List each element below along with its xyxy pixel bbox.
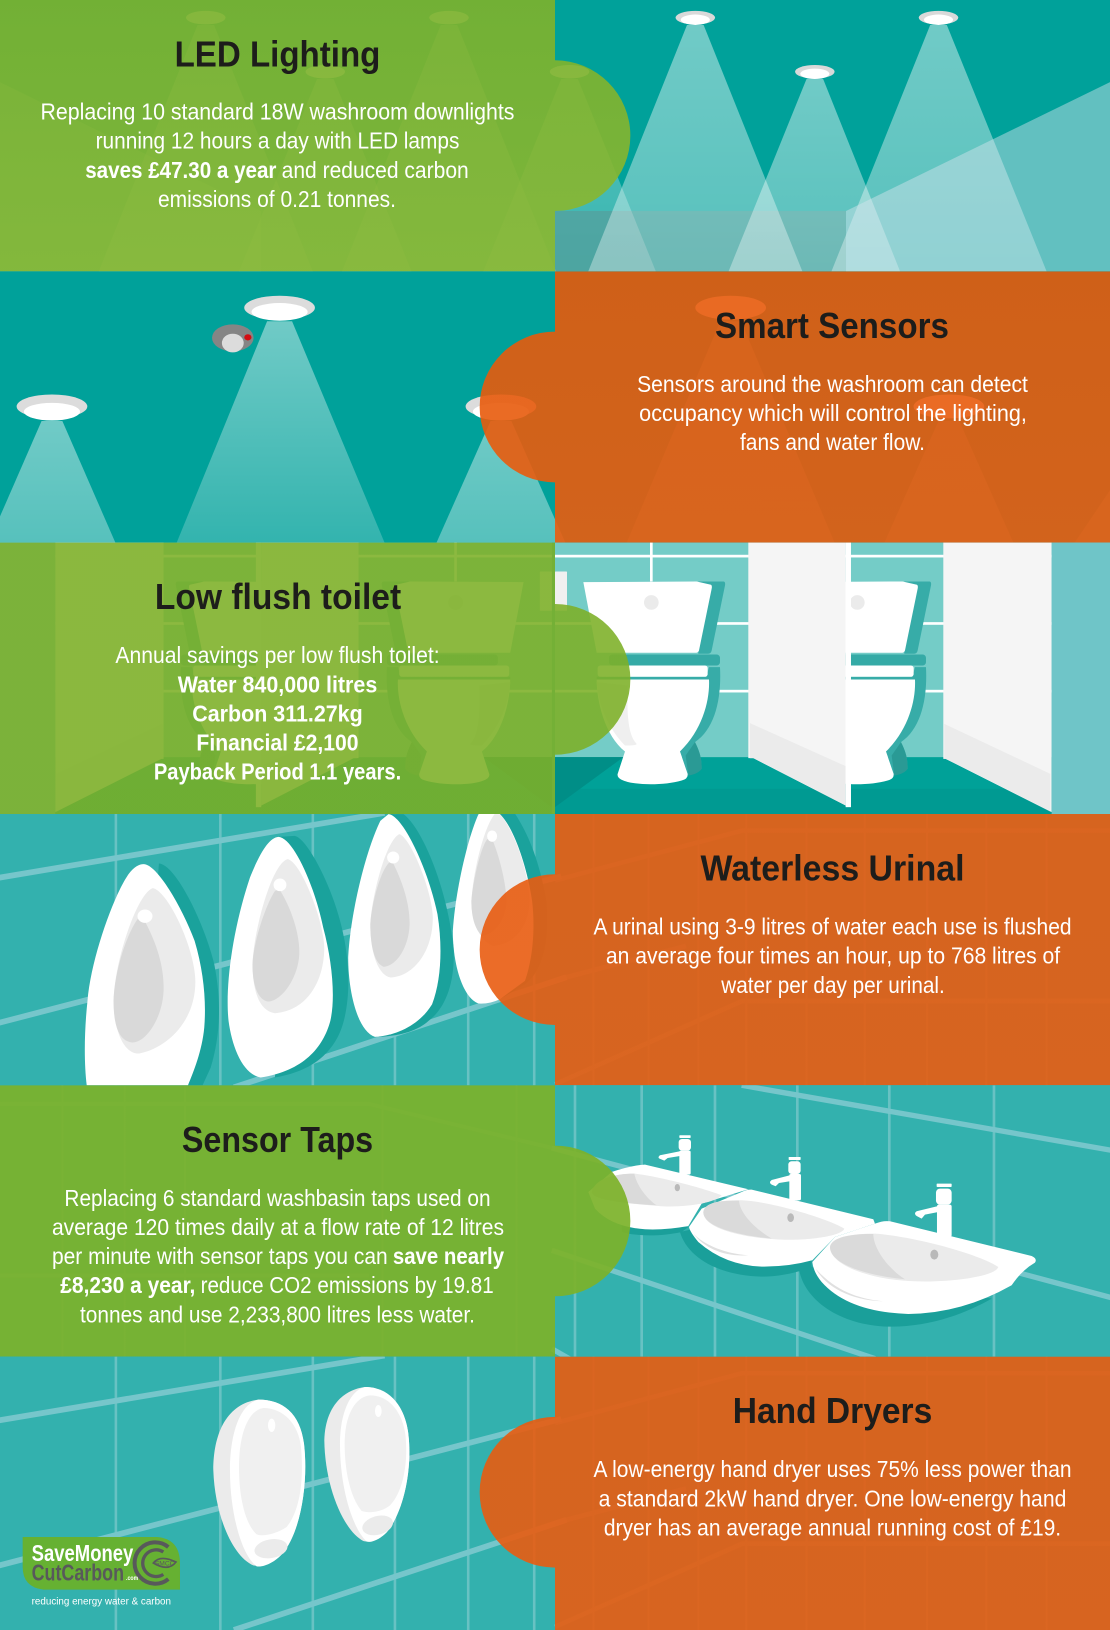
- logo: SaveMoney CutCarbon: [23, 1537, 180, 1607]
- icon: motion sensor: [212, 324, 254, 352]
- logo: SaveMoney CutCarbon: reducing energy water & carbon: [32, 1596, 171, 1607]
- text: waterless urinal body: A urinal using 3-9 litres of water each use is flushed: [593, 914, 1072, 940]
- panel: smart sensors: [0, 271, 1110, 543]
- icon: downlight 1: [676, 11, 715, 25]
- orange panel with bubble: [480, 1357, 1110, 1630]
- heading: Sensor Taps: Sensor Taps: [182, 1119, 373, 1160]
- illustration: basin 2: [680, 1190, 875, 1277]
- heading: Waterless Urinal: Waterless Urinal: [701, 847, 964, 888]
- icon: ceiling light left: [17, 395, 87, 420]
- illustration: hand dryer 2: [324, 1387, 409, 1542]
- text: hand dryers body: [593, 1456, 1072, 1540]
- panel: waterless urinal: [0, 811, 1110, 1091]
- logo: SaveMoney CutCarbon: SMCC: [155, 1561, 175, 1568]
- tile lines: [555, 1085, 1110, 1356]
- text: hand dryers body: dryer has an average annual running cost of £19.: [604, 1514, 1061, 1540]
- text: sensor taps body: per minute with sensor taps you can: [52, 1243, 388, 1269]
- text: LED lighting body: saves £47.30 a year: [85, 157, 277, 183]
- icon: downlight 2: [795, 65, 835, 79]
- illustration: basin 3: [799, 1221, 1036, 1327]
- heading: Smart Sensors: Smart Sensors: [715, 305, 949, 346]
- text: sensor taps body: Replacing 6 standard washbasin taps used on: [64, 1185, 491, 1211]
- text: sensor taps body: £8,230 a year,: [60, 1272, 195, 1298]
- text: LED lighting body: and reduced carbon: [282, 157, 469, 183]
- text: smart sensors body: occupancy which will control the lighting,: [639, 400, 1027, 426]
- text: smart sensors body: fans and water flow.: [740, 429, 925, 455]
- text: LED lighting body: emissions of 0.21 tonnes.: [158, 186, 396, 212]
- left light cones: [0, 11, 656, 271]
- text: LED lighting body: Replacing 10 standard 18W washroom downlights: [41, 99, 514, 125]
- illustration: hand dryer 1: [213, 1400, 305, 1567]
- text: hand dryers body: a standard 2kW hand dryer. One low-energy hand: [599, 1485, 1066, 1511]
- text: low flush body: Financial £2,100: [196, 730, 359, 756]
- text: smart sensors body: Sensors around the washroom can detect: [637, 371, 1028, 397]
- text: sensor taps body: reduce CO2 emissions by 19.81: [201, 1272, 494, 1298]
- text: LED lighting body: [41, 99, 514, 212]
- panel: LED lighting: [0, 0, 1110, 271]
- text: sensor taps body: [52, 1185, 504, 1327]
- tile lines under orange: [554, 1082, 558, 1086]
- text: LED lighting body: running 12 hours a day with LED lamps: [96, 128, 459, 154]
- tile lines under orange: [555, 1357, 1110, 1630]
- illustration: urinal 2: [228, 836, 348, 1078]
- right light cones: [555, 25, 1110, 271]
- heading: Low flush toilet: Low flush toilet: [155, 576, 401, 617]
- text: low flush body: Water 840,000 litres: [178, 671, 377, 697]
- green panel with bubble: [0, 543, 630, 814]
- text: waterless urinal body: water per day per urinal.: [720, 972, 945, 998]
- text: sensor taps body: average 120 times daily at a flow rate of 12 litres: [52, 1214, 504, 1240]
- text: waterless urinal body: [593, 914, 1072, 998]
- text: low flush body: [115, 642, 440, 785]
- heading: LED Lighting: LED Lighting: [175, 34, 380, 75]
- text: low flush body: Payback Period 1.1 years.: [154, 759, 401, 785]
- illustration: urinal 4: [453, 811, 547, 1004]
- heading: Hand Dryers: Hand Dryers: [733, 1390, 932, 1431]
- illustration: toilet cubicles: [555, 542, 1110, 815]
- panel: low flush toilet: [0, 542, 1110, 815]
- icon: tap 3: [915, 1184, 952, 1237]
- logo: SaveMoney CutCarbon: CutCarbon: [32, 1559, 124, 1585]
- orange panel with bubble: [480, 271, 1110, 543]
- illustration: basins and taps: [588, 1135, 1036, 1327]
- orange panel with bubble: [480, 814, 1110, 1085]
- green panel with bubble: [0, 0, 630, 271]
- icon: ceiling light right: [466, 395, 536, 420]
- text: hand dryers body: A low-energy hand dryer uses 75% less power than: [593, 1456, 1072, 1482]
- logo: SaveMoney CutCarbon: .com: [126, 1576, 138, 1582]
- panel: sensor taps: [0, 1085, 1110, 1362]
- text: low flush body: Annual savings per low flush toilet:: [115, 642, 440, 668]
- text: waterless urinal body: an average four times an hour, up to 768 litres of: [606, 943, 1061, 969]
- light cones: [0, 321, 565, 542]
- text: sensor taps body: tonnes and use 2,233,800 litres less water.: [80, 1301, 475, 1327]
- green panel with bubble: [0, 1085, 630, 1357]
- text: low flush body: Carbon 311.27kg: [192, 700, 363, 726]
- icon: downlight 3: [919, 11, 958, 25]
- icon: tap 1: [659, 1135, 691, 1175]
- icon: ceiling light centre: [244, 296, 315, 321]
- illustration: basin 1: [588, 1165, 748, 1235]
- icon: faint lights right: [695, 296, 984, 418]
- panel: hand dryers: [0, 1356, 1110, 1630]
- logo: SaveMoney CutCarbon: SaveMoney: [32, 1540, 134, 1566]
- mirrored toilet scene under green: [0, 542, 552, 815]
- icon: tap 2: [770, 1157, 801, 1200]
- text: smart sensors body: [638, 375, 1028, 450]
- tile lines: [0, 813, 566, 1087]
- illustration: urinal 3: [348, 814, 454, 1037]
- tile lines: [0, 1356, 566, 1630]
- illustration: urinal 1: [85, 864, 219, 1091]
- text: sensor taps body: save nearly: [393, 1243, 504, 1269]
